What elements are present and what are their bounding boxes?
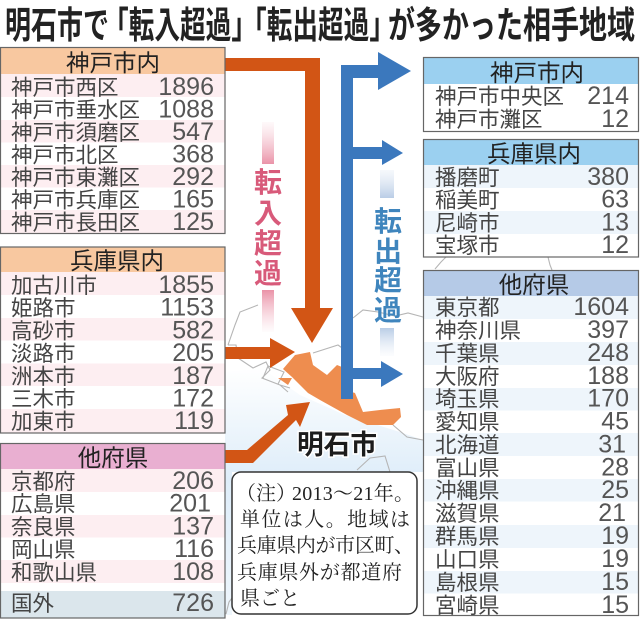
panel: inflow Kobe: 125: [172, 208, 214, 236]
panel: outflow other prefectures: 千葉県: [435, 342, 500, 366]
panel: inflow Kobe: 165: [172, 186, 214, 214]
panel: outflow Hyogo: 宝塚市: [435, 234, 500, 258]
panel: inflow Hyogo: 兵庫県内: [70, 248, 164, 274]
panel: outflow Hyogo: 兵庫県内: [487, 141, 581, 167]
panel: outflow Hyogo: 63: [601, 186, 629, 214]
panel: inflow Hyogo: 姫路市: [11, 297, 76, 321]
panel: outflow Kobe: 神戸市灘区: [435, 108, 543, 132]
panel: outflow other prefectures: 島根県: [435, 571, 500, 595]
label: inflow excess: [254, 122, 282, 332]
panel: inflow Hyogo: [0, 247, 225, 435]
panel: outflow other prefectures: 19: [601, 522, 629, 550]
panel: inflow Kobe: 神戸市垂水区: [11, 98, 140, 122]
panel: outflow Hyogo: 尼崎市: [435, 211, 500, 235]
panel: inflow Kobe: 神戸市須磨区: [11, 121, 140, 145]
panel: inflow Hyogo: 1153: [160, 294, 214, 322]
panel: inflow Hyogo: 加古川市: [11, 274, 97, 298]
panel: outflow Hyogo: 稲美町: [435, 189, 500, 213]
panel: outflow Kobe: 214: [587, 82, 629, 110]
arrow: outflow to Kobe, Hyogo and other prefectures: [341, 52, 411, 399]
panel: inflow Hyogo: 高砂市: [11, 319, 76, 343]
panel: outflow Hyogo: 380: [587, 163, 629, 191]
panel: outflow Hyogo: [424, 140, 638, 259]
Akashi city shape: [278, 352, 401, 425]
map: sea and coast lines: [225, 257, 552, 615]
panel: outflow other prefectures: 397: [587, 316, 629, 344]
panel: outflow other prefectures: 15: [601, 591, 629, 619]
panel: inflow Kobe: 292: [172, 163, 214, 191]
panel: inflow other prefectures: 116: [174, 535, 214, 563]
title: 「転入超過」: [103, 5, 257, 46]
panel: outflow other prefectures: 北海道: [435, 433, 500, 457]
title: 明石市で: [5, 5, 109, 46]
panel: outflow other prefectures: 188: [587, 362, 629, 390]
label: outflow excess: 出: [374, 236, 402, 267]
panel: inflow other prefectures: 京都府: [11, 470, 76, 494]
panel: inflow other prefectures: 726: [172, 589, 214, 617]
panel: inflow other prefectures: 206: [172, 467, 214, 495]
panel: inflow Kobe: 神戸市内: [66, 50, 160, 76]
panel: outflow other prefectures: 45: [601, 408, 629, 436]
panel: outflow other prefectures: 1604: [573, 293, 629, 321]
panel: inflow Hyogo: 172: [172, 384, 214, 412]
arrow: Kobe inflow: [225, 58, 333, 343]
label: inflow excess: 転: [254, 167, 282, 198]
panel: outflow other prefectures: 群馬県: [435, 525, 500, 549]
panel: outflow Kobe: 神戸市中央区: [435, 85, 564, 109]
panel: outflow Kobe: 神戸市内: [490, 60, 584, 86]
panel: inflow Hyogo: 加東市: [11, 410, 76, 434]
panel: outflow other prefectures: [424, 270, 638, 619]
title: [5, 5, 635, 46]
arrow: Hyogo inflow: [222, 338, 295, 368]
note box: （注）: [236, 482, 296, 505]
panel: outflow other prefectures: 28: [601, 453, 629, 481]
label: outflow excess: 転: [374, 206, 402, 237]
panel: outflow other prefectures: 宮崎県: [435, 594, 500, 618]
note box: 単位は人。地域は: [240, 508, 410, 531]
panel: outflow other prefectures: 25: [601, 476, 629, 504]
label: outflow excess: [374, 170, 402, 356]
panel: outflow Kobe: 12: [601, 105, 629, 133]
panel: outflow other prefectures: 富山県: [435, 456, 500, 480]
panel: inflow Hyogo: 1855: [158, 271, 214, 299]
panel: inflow other prefectures: 国外: [11, 592, 55, 616]
panel: inflow Kobe: 神戸市西区: [11, 76, 119, 100]
note box: 2013～21年。: [292, 482, 414, 505]
panel: inflow Hyogo: 582: [172, 316, 214, 344]
panel: inflow Kobe: 368: [172, 140, 214, 168]
panel: inflow other prefectures: 201: [169, 490, 211, 518]
label: inflow excess: 入: [254, 198, 282, 229]
panel: outflow other prefectures: 神奈川県: [435, 319, 521, 343]
panel: outflow other prefectures: 大阪府: [435, 365, 500, 389]
panel: outflow Hyogo: 13: [601, 208, 629, 236]
panel: inflow Kobe: 神戸市兵庫区: [11, 188, 140, 212]
title: が多かった: [388, 5, 523, 46]
panel: outflow Hyogo: 播磨町: [435, 166, 500, 190]
label: outflow excess: 超: [374, 265, 402, 296]
Akashi city label: 明石市: [297, 430, 377, 460]
panel: inflow other prefectures: 広島県: [11, 493, 76, 517]
panel: outflow other prefectures: 他府県: [499, 272, 569, 298]
panel: outflow other prefectures: 沖縄県: [435, 479, 500, 503]
label: inflow excess: 過: [254, 258, 282, 289]
label: inflow excess: 超: [254, 228, 282, 259]
panel: inflow Kobe: 547: [172, 118, 214, 146]
panel: outflow other prefectures: 15: [601, 568, 629, 596]
panel: outflow other prefectures: 31: [598, 430, 626, 458]
note box: 県ごと: [240, 587, 300, 610]
panel: outflow other prefectures: 19: [601, 545, 629, 573]
panel: inflow Kobe: 神戸市長田区: [11, 211, 140, 235]
panel: outflow other prefectures: 滋賀県: [435, 502, 500, 526]
panel: inflow other prefectures: [0, 444, 225, 618]
panel: outflow Kobe: [424, 58, 638, 133]
panel: inflow other prefectures: 奈良県: [11, 515, 76, 539]
panel: inflow other prefectures: 和歌山県: [11, 561, 97, 585]
panel: inflow Kobe: 神戸市東灘区: [11, 166, 140, 190]
panel: inflow Kobe: 神戸市北区: [11, 144, 119, 168]
panel: outflow other prefectures: 山口県: [435, 548, 500, 572]
panel: outflow other prefectures: 埼玉県: [435, 388, 500, 412]
panel: inflow Kobe: [0, 48, 225, 236]
panel: outflow other prefectures: 東京都: [435, 296, 500, 320]
note box: 兵庫県内が市区町、: [237, 534, 414, 557]
panel: inflow Hyogo: 119: [174, 407, 214, 435]
arrow: other prefectures inflow: [225, 402, 310, 463]
panel: inflow Kobe: 1896: [158, 73, 214, 101]
panel: inflow Kobe: 1088: [158, 96, 214, 124]
note box: [232, 472, 417, 614]
panel: inflow other prefectures: 岡山県: [11, 538, 76, 562]
panel: inflow Hyogo: 洲本市: [11, 365, 76, 389]
panel: outflow other prefectures: 170: [587, 385, 629, 413]
title: 「転出超過」: [241, 5, 395, 46]
panel: outflow Hyogo: 12: [601, 231, 629, 259]
panel: outflow other prefectures: 21: [598, 499, 626, 527]
panel: inflow Hyogo: 三木市: [11, 388, 76, 412]
panel: inflow Hyogo: 187: [172, 362, 214, 390]
label: outflow excess: 過: [374, 295, 402, 326]
panel: inflow Hyogo: 205: [172, 339, 214, 367]
panel: inflow other prefectures: 108: [172, 558, 214, 586]
panel: inflow Hyogo: 淡路市: [11, 342, 76, 366]
panel: outflow other prefectures: 愛知県: [435, 410, 500, 434]
panel: inflow other prefectures: 他府県: [78, 445, 148, 471]
panel: outflow other prefectures: 248: [587, 339, 629, 367]
panel: inflow other prefectures: 137: [172, 512, 214, 540]
note box: 兵庫県外が都道府: [237, 561, 402, 584]
